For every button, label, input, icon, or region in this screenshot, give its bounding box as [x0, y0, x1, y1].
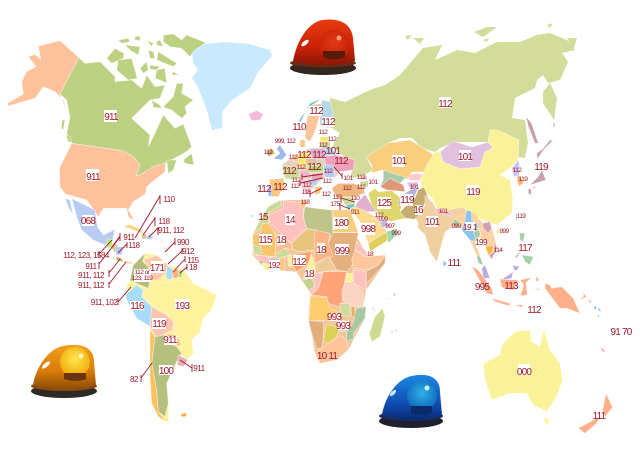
labels: americas: 911 — [193, 364, 206, 373]
map: north america — [7, 34, 206, 220]
Venezuela — [143, 255, 168, 280]
labels: asia pacific: 112 — [438, 99, 453, 110]
Zimbabwe — [337, 320, 348, 332]
Burkina Faso — [275, 248, 290, 258]
labels: europe, africa, west asia: 101 — [425, 217, 440, 228]
Caucasus — [360, 175, 368, 187]
labels: asia pacific: 117 — [518, 243, 533, 254]
labels: europe, africa, west asia: 112 — [319, 142, 328, 149]
Uzbekistan — [380, 170, 412, 187]
labels: americas: 193 — [175, 301, 190, 312]
Mauritania — [253, 223, 276, 257]
labels: europe, africa, west asia: 101 — [343, 175, 354, 182]
labels: americas: 116 — [130, 301, 145, 312]
labels: europe, africa, west asia: 112 — [303, 182, 312, 189]
Baltics — [320, 137, 337, 155]
Libya — [303, 207, 333, 237]
Vietnam south — [489, 242, 497, 259]
labels: asia pacific — [438, 97, 633, 422]
Turkmenistan — [380, 178, 405, 192]
map: Russia — [330, 23, 577, 178]
map: korea and japan — [512, 117, 555, 220]
labels: americas: 911, 112 — [78, 271, 105, 280]
blue base — [379, 411, 443, 428]
blue dome — [382, 375, 442, 420]
Mozambique — [347, 307, 366, 342]
New Caledonia — [600, 347, 605, 353]
icon: blue siren — [379, 375, 443, 428]
Thailand — [473, 230, 480, 238]
South Korea — [517, 174, 524, 186]
labels: europe, africa, west asia: 112 — [297, 164, 306, 171]
labels: europe, africa, west asia: 15 — [258, 212, 269, 223]
labels: americas: 911, 102 — [91, 298, 118, 307]
labels: asia pacific: 112 — [527, 305, 542, 316]
Indonesia — [472, 266, 592, 313]
Caribbean — [123, 224, 167, 257]
Chile — [150, 330, 168, 423]
labels: europe, africa, west asia: 110 — [351, 195, 360, 202]
labels: europe, africa, west asia: 101 — [392, 156, 407, 167]
USA — [59, 143, 166, 220]
labels: europe, africa, west asia: 18 — [367, 251, 374, 258]
Finland — [320, 100, 333, 128]
Kazakhstan — [366, 140, 437, 178]
Peru — [125, 285, 152, 327]
labels: europe, africa, west asia: 999 — [378, 216, 389, 223]
labels: europe, africa, west asia: 993 — [327, 312, 342, 323]
Ukraine — [325, 155, 355, 172]
labels: americas: 112 or — [135, 269, 151, 276]
Central America — [107, 238, 133, 264]
labels: europe, africa, west asia: 112 — [282, 166, 297, 177]
labels: europe, africa, west asia: 112 — [357, 184, 366, 191]
labels: europe, africa, west asia: 10 11 — [317, 351, 338, 362]
labels: europe, africa, west asia: 112 — [264, 149, 273, 156]
Afghanistan — [398, 188, 418, 205]
labels: europe, africa, west asia: 112 — [322, 191, 331, 198]
leader lines — [99, 167, 355, 382]
labels: asia pacific: 114 — [494, 247, 503, 254]
labels: asia pacific: 101 — [438, 208, 449, 215]
red lens — [319, 30, 349, 60]
labels: europe, africa, west asia: 112 — [343, 185, 352, 192]
Myanmar — [462, 210, 478, 242]
Australia — [483, 328, 563, 412]
Mali — [263, 233, 293, 258]
labels: europe, africa, west asia: 115 — [258, 235, 273, 246]
labels: americas: 118 — [128, 241, 141, 250]
labels: europe, africa, west asia: 118 — [302, 189, 311, 196]
labels: asia pacific: 101 — [458, 152, 473, 163]
Cameroon — [303, 255, 315, 278]
labels: europe, africa, west asia: 112 — [319, 129, 328, 136]
Vietnam — [483, 222, 492, 233]
red dome — [293, 19, 355, 65]
Bangladesh and Bhutan — [453, 218, 459, 228]
labels: americas: 115 — [187, 256, 200, 265]
labels: asia pacific: 999 — [451, 223, 462, 230]
Turkey — [332, 183, 365, 197]
Malaysia — [477, 255, 483, 265]
Alaska — [7, 41, 79, 117]
labels: asia pacific: 995 — [475, 282, 490, 293]
labels: asia pacific: 111 — [593, 411, 607, 422]
labels: europe, africa, west asia: 112 — [334, 156, 349, 167]
New Zealand — [578, 393, 613, 433]
Philippines — [515, 233, 533, 265]
Iran — [368, 188, 405, 222]
labels: europe, africa, west asia: 112 — [297, 150, 312, 161]
icon: orange siren — [31, 345, 97, 398]
Japan — [526, 117, 555, 195]
Yemen — [368, 232, 388, 252]
Namibia — [308, 321, 323, 348]
labels: europe, africa, west asia: 101 — [368, 179, 379, 186]
labels: americas: 119 — [152, 319, 167, 330]
Cambodia — [485, 245, 493, 255]
labels: europe, africa, west asia: 112 — [292, 177, 301, 184]
Germany — [298, 153, 310, 167]
Ethiopia — [352, 250, 386, 270]
labels: europe, africa, west asia: 998 — [361, 224, 376, 235]
DR Congo — [312, 272, 347, 308]
India — [415, 195, 470, 262]
labels: europe, africa, west asia: 112 — [328, 136, 337, 143]
Argentina — [152, 335, 182, 417]
Sudan — [328, 233, 358, 272]
Norway — [297, 94, 328, 130]
Zambia — [340, 303, 350, 317]
Paraguay — [166, 333, 182, 347]
labels: asia pacific: 119 — [534, 162, 549, 173]
Botswana — [323, 324, 340, 343]
labels: europe, africa, west asia: 911 — [351, 209, 360, 216]
Algeria — [268, 200, 307, 243]
Mexico — [65, 198, 115, 245]
Taiwan — [516, 213, 517, 220]
Falklands — [181, 413, 187, 417]
UK and Ireland — [266, 145, 287, 160]
Sweden — [305, 103, 322, 142]
Sri Lanka — [443, 260, 447, 267]
labels: europe, africa, west asia: 112 — [323, 178, 332, 185]
blue highlight — [389, 389, 397, 397]
Poland — [310, 148, 325, 158]
Canada — [60, 34, 206, 176]
South Africa — [315, 335, 348, 363]
Bolivia — [150, 307, 173, 338]
Malaysia and Brunei — [482, 265, 519, 280]
labels: europe, africa, west asia: 14 — [285, 215, 296, 226]
orange lens — [60, 347, 90, 381]
labels: americas: 990 — [177, 238, 190, 247]
Egypt — [333, 210, 358, 232]
Eritrea — [355, 242, 368, 257]
labels: europe, africa, west asia: 112 — [375, 212, 384, 219]
labels: europe, africa, west asia: 125 — [377, 198, 392, 209]
labels: americas: 171 — [150, 263, 165, 274]
Iraq — [355, 194, 377, 212]
labels: asia pacific: 199 — [475, 238, 488, 247]
labels: europe, africa, west asia — [257, 106, 440, 362]
North Korea — [512, 160, 519, 177]
Gulf states — [375, 215, 388, 227]
orange highlight — [41, 360, 51, 370]
labels: asia pacific: 111 — [448, 258, 462, 269]
France — [282, 165, 300, 180]
labels: americas: 068 — [81, 216, 96, 227]
labels: europe, africa, west asia: 175 — [330, 201, 341, 208]
Senegal and Guinea — [253, 245, 279, 272]
icon: red siren — [290, 19, 356, 75]
red base — [290, 58, 356, 75]
labels: europe, africa, west asia: 112 — [324, 168, 333, 175]
labels: asia pacific: 91 70 — [610, 327, 633, 338]
labels: asia pacific: 119 — [517, 213, 526, 220]
China — [420, 130, 519, 225]
Morocco — [253, 200, 282, 233]
Brazil — [142, 280, 217, 360]
labels: europe, africa, west asia: 112 — [312, 150, 327, 161]
Africa underlay — [253, 200, 386, 363]
labels: europe, africa, west asia: 112 — [292, 257, 307, 268]
Saudi Arabia — [350, 207, 387, 243]
labels: americas: 911, 112 — [78, 281, 105, 290]
Denmark, Netherlands — [293, 140, 305, 162]
Levant — [340, 197, 355, 210]
Uganda — [345, 273, 353, 283]
labels: americas: 118 — [158, 217, 171, 226]
labels: europe, africa, west asia: 192 — [268, 261, 281, 270]
labels: asia pacific: 19 1 — [463, 223, 478, 232]
labels: europe, africa, west asia: 180 — [334, 218, 349, 229]
labels: asia pacific: 000 — [517, 367, 532, 378]
Spain — [269, 178, 285, 197]
map: central asia — [366, 130, 519, 262]
Cape Verde and Canary dots — [250, 203, 254, 218]
Ecuador — [127, 283, 135, 293]
Nepal — [436, 208, 452, 216]
labels: europe, africa, west asia: 999, 112 — [275, 138, 296, 145]
Uruguay — [177, 355, 188, 367]
labels: americas: 912 — [182, 247, 195, 256]
orange dome — [33, 345, 96, 390]
labels: europe, africa, west asia: 112 — [257, 184, 272, 195]
labels: europe, africa, west asia: 112 — [309, 106, 324, 117]
labels: americas: 123, 119 — [132, 275, 153, 282]
Suriname — [172, 268, 178, 278]
map: africa — [250, 200, 397, 363]
labels: americas: 911 — [85, 262, 98, 271]
labels: europe, africa, west asia: 119 — [400, 195, 415, 206]
map: europe and middle east — [248, 94, 425, 252]
labels: americas: 911 — [163, 335, 178, 346]
labels: europe, africa, west asia: 118 — [301, 199, 310, 206]
labels: europe, africa, west asia: 112 — [273, 182, 288, 193]
Iceland — [248, 111, 263, 121]
map: southeast asia and oceania — [443, 210, 613, 433]
labels: asia pacific: 112 — [513, 167, 522, 174]
map: Greenland — [192, 42, 272, 130]
Tanzania — [343, 283, 363, 307]
Mongolia — [440, 141, 493, 169]
labels: americas: 911 — [104, 112, 119, 123]
Central Europe — [299, 158, 335, 195]
map: central and south america — [65, 198, 217, 423]
labels: americas: 911 — [123, 233, 136, 242]
Chad — [314, 230, 333, 263]
French Guiana — [178, 270, 183, 277]
labels: europe, africa, west asia: 16 — [413, 205, 424, 216]
Ghana etc — [279, 255, 292, 271]
labels: europe, africa, west asia: 112 — [357, 174, 366, 181]
Hainan — [496, 230, 500, 233]
Nigeria — [292, 252, 312, 272]
labels: europe, africa, west asia: 110 — [292, 122, 307, 133]
South America underlay — [125, 253, 217, 423]
Oman — [387, 228, 398, 243]
labels: europe, africa, west asia: 999 — [391, 230, 402, 237]
CAR — [315, 257, 337, 273]
labels: asia pacific: 119 — [519, 176, 528, 183]
labels: europe, africa, west asia: 993 — [336, 321, 351, 332]
labels: americas: 18 — [189, 263, 198, 272]
Colombia — [130, 253, 150, 288]
labels: europe, africa, west asia: 999 — [335, 246, 350, 257]
labels: europe, africa, west asia: 18 — [304, 269, 315, 280]
labels: europe, africa, west asia: 18 — [276, 235, 287, 246]
Guyana — [166, 265, 173, 280]
labels: europe, africa, west asia: 101 — [409, 184, 420, 191]
Kenya — [353, 270, 366, 290]
Niger — [292, 229, 316, 252]
labels: asia pacific: 119 — [466, 187, 481, 198]
Congo and Gabon — [302, 273, 323, 293]
labels: asia pacific: 113 — [504, 281, 519, 292]
Portugal — [268, 185, 272, 197]
labels: americas: 110 — [163, 195, 176, 204]
labels: americas: 911, 112 — [158, 226, 185, 235]
Tasmania — [543, 418, 549, 427]
Kyrgyz and Tajik — [407, 173, 425, 188]
Somalia — [366, 255, 386, 283]
Malawi — [351, 305, 355, 319]
blue lens — [407, 381, 437, 415]
Tunisia — [300, 200, 307, 209]
Madagascar — [369, 308, 385, 342]
orange base — [31, 381, 97, 398]
labels: americas — [63, 110, 206, 384]
labels: americas: 911 — [86, 172, 101, 183]
Laos — [478, 228, 492, 245]
labels: americas: 82 — [130, 375, 139, 384]
labels: asia pacific: 999 — [499, 228, 510, 235]
red highlight — [300, 39, 310, 47]
labels: europe, africa, west asia: 18 — [316, 245, 327, 256]
Pakistan — [400, 187, 428, 220]
labels: europe, africa, west asia: 112 — [291, 183, 300, 190]
labels: europe, africa, west asia: 110 — [333, 194, 342, 201]
labels: europe, africa, west asia: 112 — [307, 162, 322, 173]
labels: europe, africa, west asia: 101 — [326, 146, 341, 157]
labels: europe, africa, west asia: 112 — [321, 117, 336, 128]
labels: americas: 112, 123, 1584 — [63, 251, 110, 260]
Indian Ocean islands — [372, 292, 397, 334]
Europe underlay — [282, 148, 355, 190]
Indochina underlay — [453, 210, 497, 265]
labels: americas: 100 — [159, 366, 174, 377]
Pacific islands — [593, 306, 611, 332]
Angola — [308, 297, 338, 321]
labels: europe, africa, west asia: 112 — [289, 154, 298, 161]
labels: europe, africa, west asia: 997 — [385, 223, 396, 230]
